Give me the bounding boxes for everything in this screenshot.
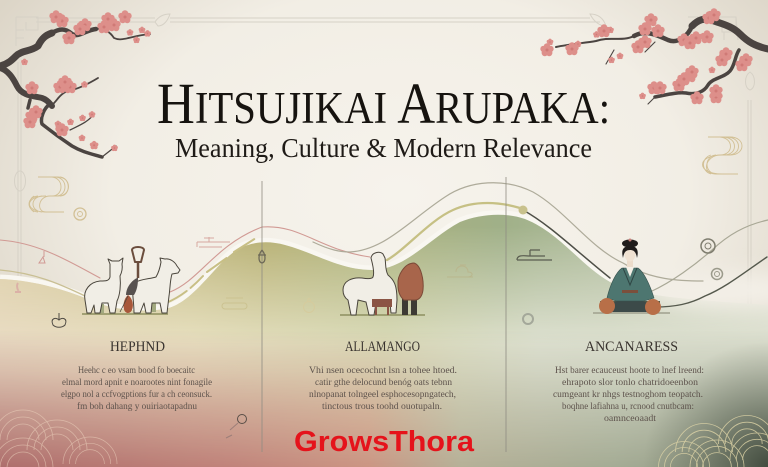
- column 3 body text: ehrapoto slor tonlo chatridoeenbon: [562, 377, 698, 388]
- subtitle: Meaning, Culture & Modern Relevance: [175, 133, 592, 163]
- column 2 body text: Vhi nsen ocecochnt lsn a tohee htoed.: [309, 365, 457, 376]
- column 2 body text: nlnopanat tolngeel esphocesopngatech,: [309, 389, 456, 400]
- illustration: seated figure in kimono: [593, 238, 670, 315]
- column 3 body text: cumgeant kr nhgs testnoghom teopatch.: [553, 389, 703, 400]
- column 1 body text: fm boh dahang y ouiriaotapadnu: [77, 401, 197, 412]
- right cherry blossom branch: [540, 8, 768, 104]
- seigaiha waves bottom right: [658, 416, 768, 467]
- column 3 body text: Hst barer ecauceust hoote to lnef lreend:: [555, 365, 704, 376]
- decorative frame: [14, 14, 754, 400]
- column 1 body text: elgpo nol a ccfvogptions fur a ch ceonsuck.: [61, 389, 212, 400]
- column 3 body text: boqhne lafiahna u, rcnood cnutbcam:: [562, 401, 694, 412]
- column dividers: [262, 177, 506, 452]
- icon: gold cloud left: [29, 177, 86, 220]
- illustration: alpaca and brown llama: [340, 252, 425, 315]
- column 1 heading: HEPHND: [110, 339, 165, 355]
- column 3 body text: [553, 365, 704, 424]
- hill band: coloured ground with three column tints: [0, 200, 768, 467]
- column 1 body text: Heehc c eo vsam bood fo boecaitc: [78, 365, 195, 376]
- column 3 heading: ANCANARESS: [585, 339, 678, 355]
- column 2 heading: ALLAMANGO: [345, 339, 420, 355]
- seigaiha waves bottom left: [0, 410, 117, 467]
- column 3 body text: oamnceoaadt: [604, 413, 656, 424]
- illustration: two alpacas with lantern: [82, 247, 180, 314]
- column 2 body text: catir gthe delocund benóg oats tebnn: [315, 377, 452, 388]
- flowing lines: [0, 183, 768, 307]
- left cherry blossom branch: [0, 10, 151, 157]
- title: HITSUJIKAI ARUPAKA:: [157, 71, 610, 136]
- column 1 body text: elmal mord apnit e noarootes nint fonagile: [62, 377, 212, 388]
- column 2 body text: [309, 365, 457, 412]
- icon: gold cloud right: [702, 137, 742, 174]
- small ornaments: [15, 206, 722, 438]
- column 2 body text: tinctous trous toohd ouotupaln.: [322, 401, 442, 412]
- watermark: GrowsThora: GrowsThora: [294, 426, 475, 458]
- column 1 body text: [61, 365, 212, 412]
